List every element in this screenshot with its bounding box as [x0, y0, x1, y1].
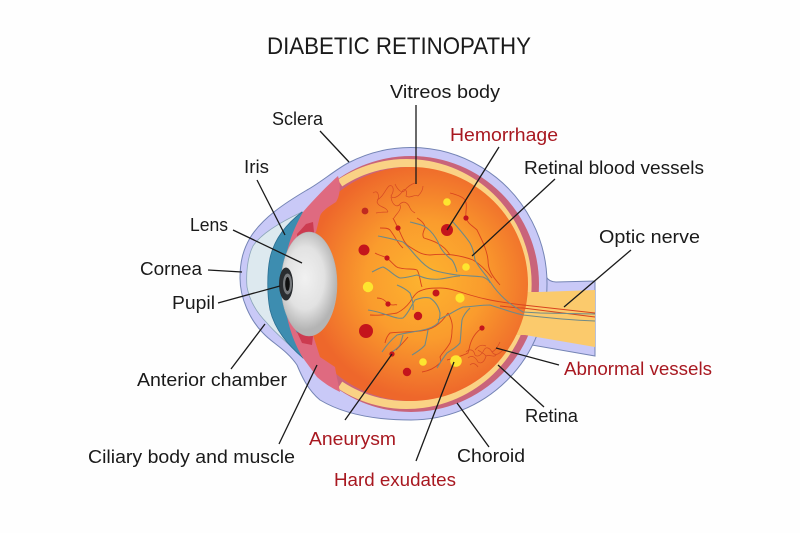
labels — [88, 81, 712, 490]
labels: Hard exudates — [334, 469, 456, 490]
ciliary body upper — [284, 176, 340, 275]
labels: Abnormal vessels — [564, 358, 712, 379]
title: DIABETIC RETINOPATHY — [267, 33, 531, 60]
pupil — [279, 268, 293, 300]
labels: Retina — [525, 405, 579, 426]
iris — [268, 212, 312, 358]
optic nerve sheath — [512, 250, 595, 372]
labels: Cornea — [140, 258, 203, 279]
labels: Hemorrhage — [450, 124, 558, 145]
cornea and anterior chamber — [247, 212, 303, 358]
labels: Sclera — [272, 108, 324, 129]
ciliary body lower — [285, 303, 340, 392]
vitreous body — [294, 167, 528, 401]
eye diagram — [240, 148, 595, 420]
labels: Lens — [190, 214, 228, 235]
hemorrhage and aneurysm dots — [358, 208, 485, 376]
hard exudate dots — [363, 198, 470, 367]
retinal vessels — [368, 183, 595, 372]
labels: Ciliary body and muscle — [88, 446, 295, 467]
labels: Anterior chamber — [137, 369, 287, 390]
labels: Vitreos body — [390, 81, 501, 102]
choroid — [283, 156, 539, 412]
labels: Retinal blood vessels — [524, 157, 704, 178]
leader lines — [208, 105, 631, 461]
labels: Aneurysm — [309, 428, 396, 449]
labels: Iris — [244, 156, 269, 177]
abnormal vessels upper — [373, 183, 423, 218]
abnormal vessels lower — [466, 342, 503, 367]
labels: Choroid — [457, 445, 525, 466]
labels: Optic nerve — [599, 226, 700, 247]
lens — [281, 232, 337, 336]
optic nerve — [505, 290, 595, 347]
ciliary muscle dark patches — [297, 222, 314, 345]
retina — [340, 163, 528, 405]
labels: Pupil — [172, 292, 215, 313]
sclera — [240, 148, 547, 420]
